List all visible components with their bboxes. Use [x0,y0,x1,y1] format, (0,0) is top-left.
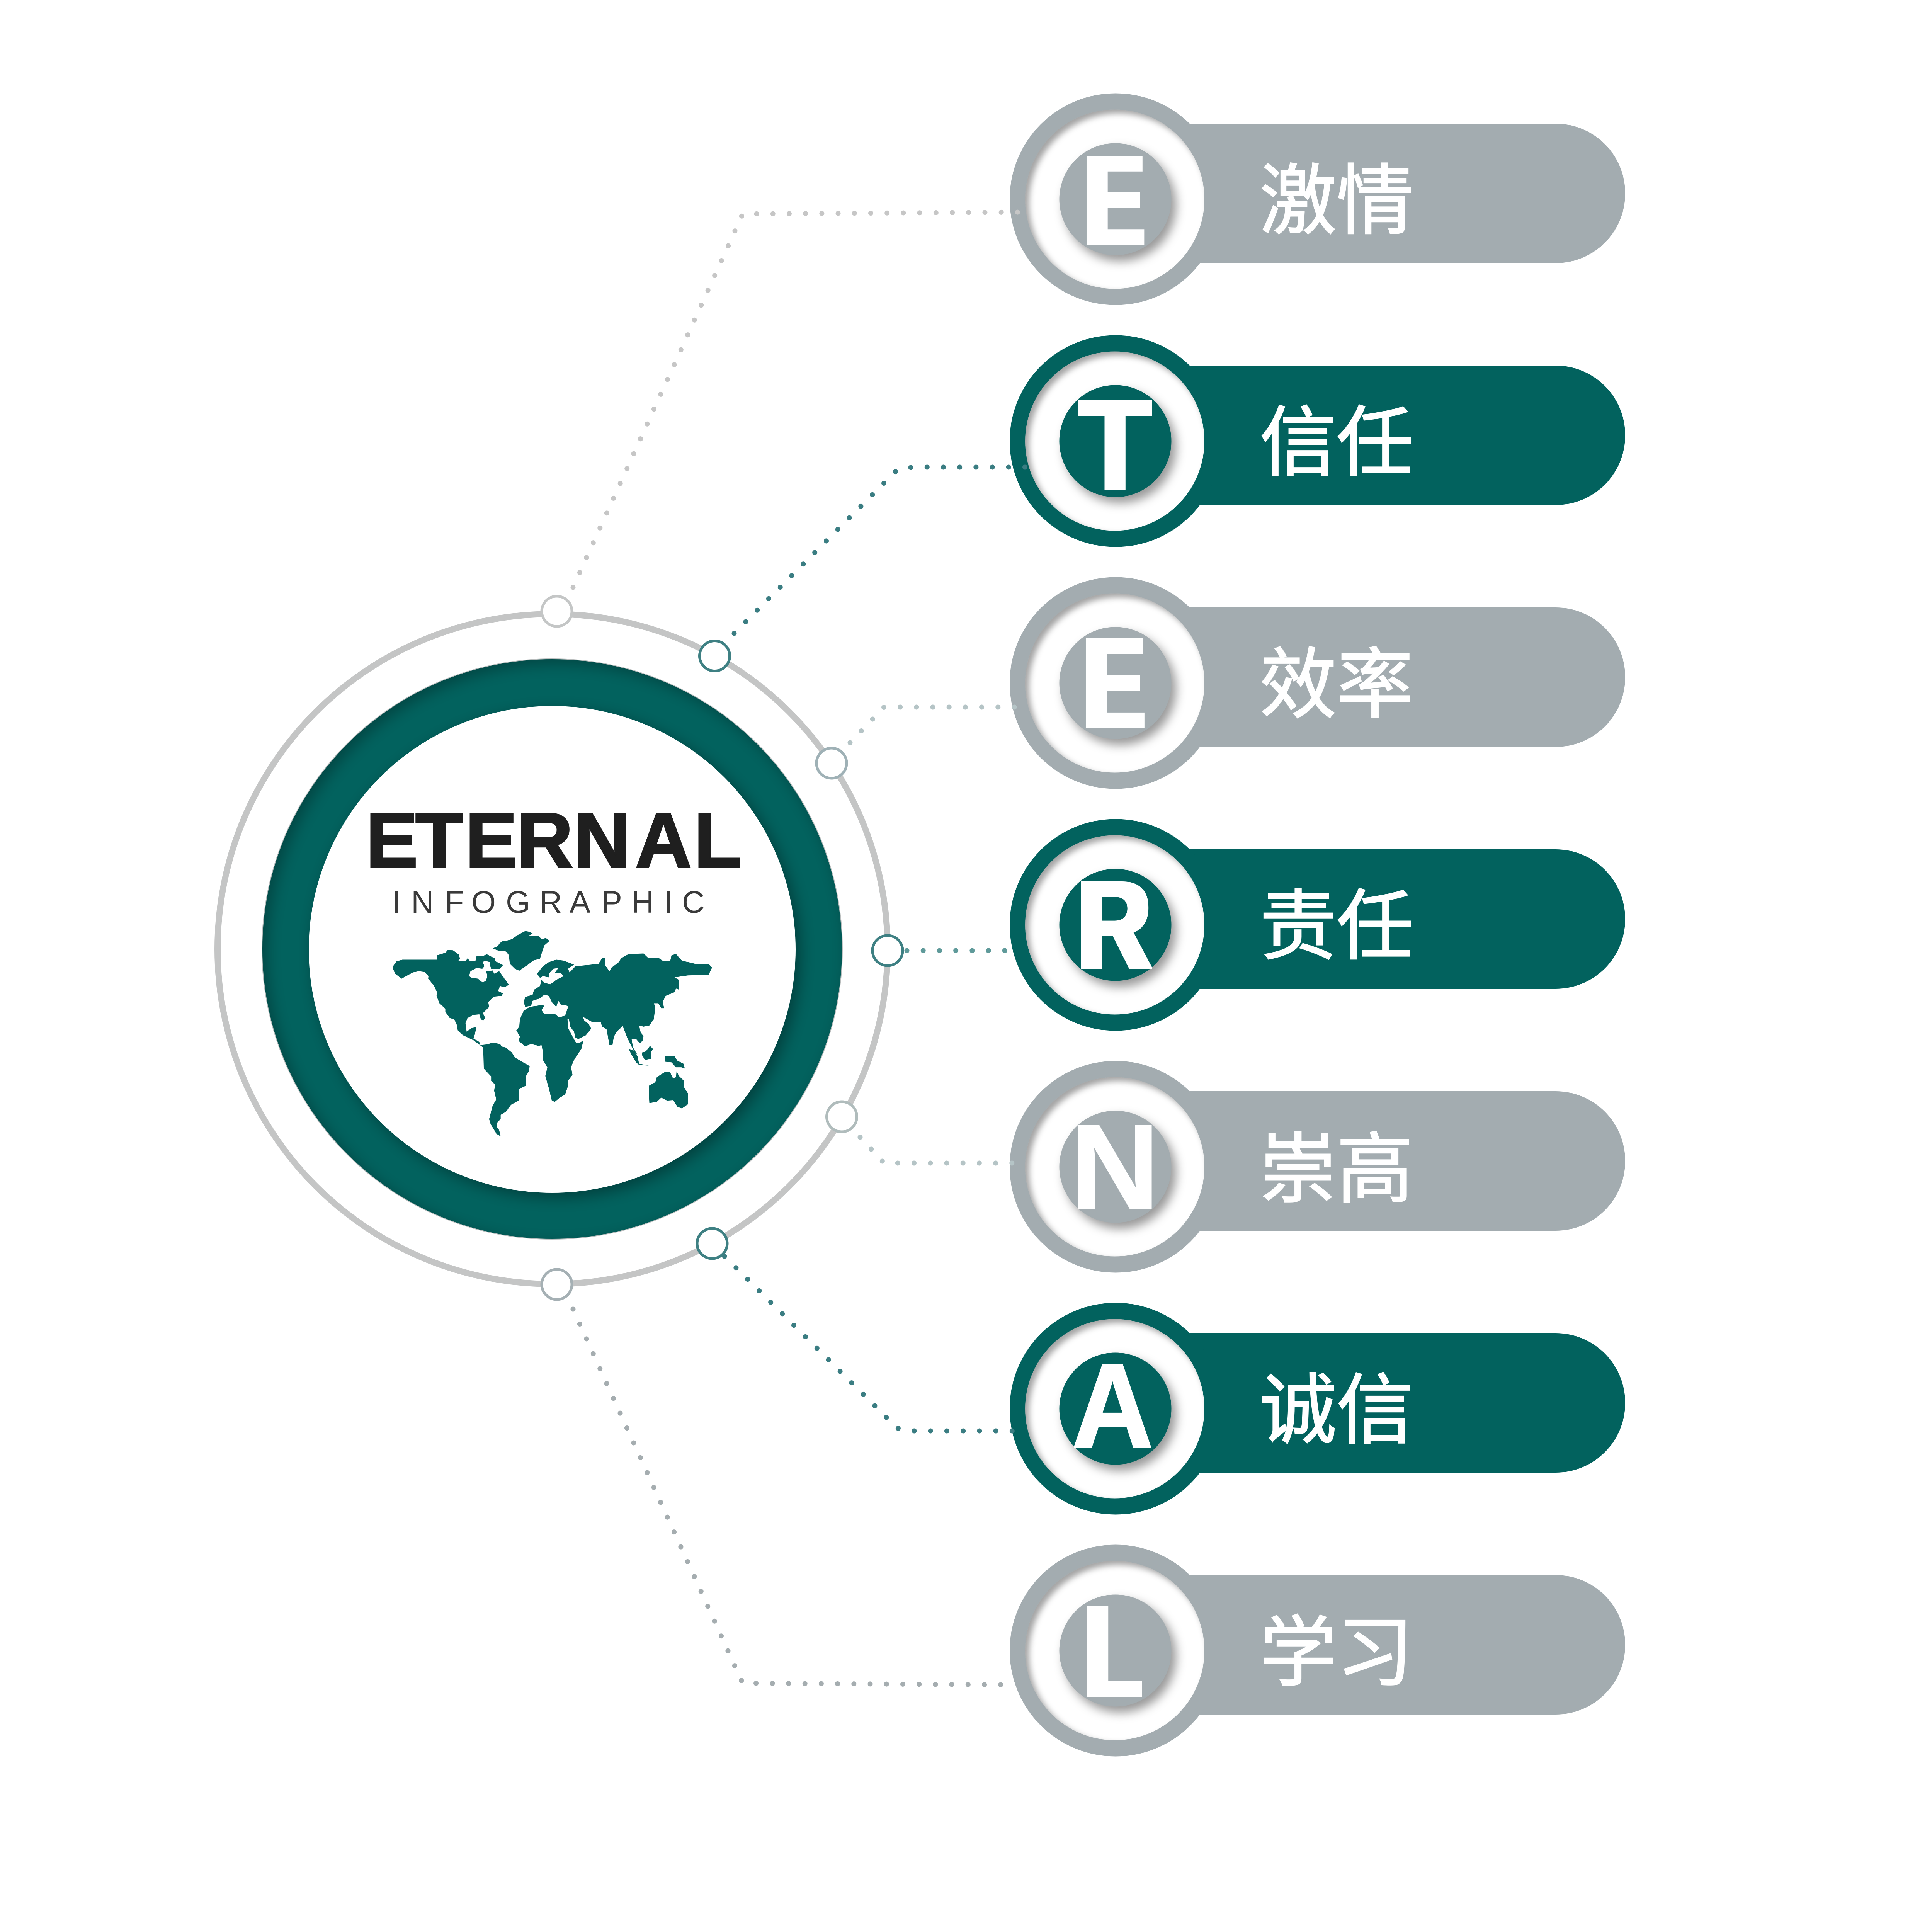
row 7: L 学习 [1010,1545,1625,1757]
connector: E 激情 [573,212,1024,587]
connector: N 崇高 [860,1137,1014,1163]
row 3: E 效率 [1010,577,1625,789]
letter A: A [1072,1339,1153,1473]
connector: R 责任 [907,948,1020,953]
subtitle: INFOGRAPHIC: INFOGRAPHIC [392,885,705,920]
row 5: N 崇高 [1010,1061,1625,1273]
node: bottom [542,1269,572,1300]
node: R [872,936,903,966]
outer ring [218,614,888,1284]
label: 诚信 [1260,1368,1413,1454]
connector: A 诚信 [724,1256,1026,1431]
connector: E 效率 [850,707,1014,743]
letter N: N [1070,1100,1160,1234]
connector: L 学习 [573,1309,1009,1685]
node: top [542,596,572,626]
label: 激情 [1260,158,1413,244]
letter E: E [1085,129,1143,272]
title: ETERNAL: ETERNAL [366,796,742,884]
label: 崇高 [1260,1127,1413,1213]
label: 学习 [1260,1610,1413,1696]
row 2: T 信任 [1010,335,1625,547]
label: 信任 [1260,400,1413,486]
central badge [257,654,857,1254]
node: T [699,641,730,671]
icon: world map [393,931,712,1136]
node: E [816,748,847,778]
letter L: L [1085,1579,1141,1723]
label: 效率 [1260,642,1413,728]
letter E: E [1084,611,1144,755]
row 4: R 责任 [1010,819,1625,1031]
label: 责任 [1260,884,1413,970]
row 1: E 激情 [1010,94,1625,305]
letter T: T [1079,373,1151,516]
row 6: A 诚信 [1010,1303,1625,1515]
letter R: R [1077,855,1151,995]
node: A [697,1228,727,1259]
connector: T 信任 [734,467,1029,633]
node: N [827,1102,857,1132]
